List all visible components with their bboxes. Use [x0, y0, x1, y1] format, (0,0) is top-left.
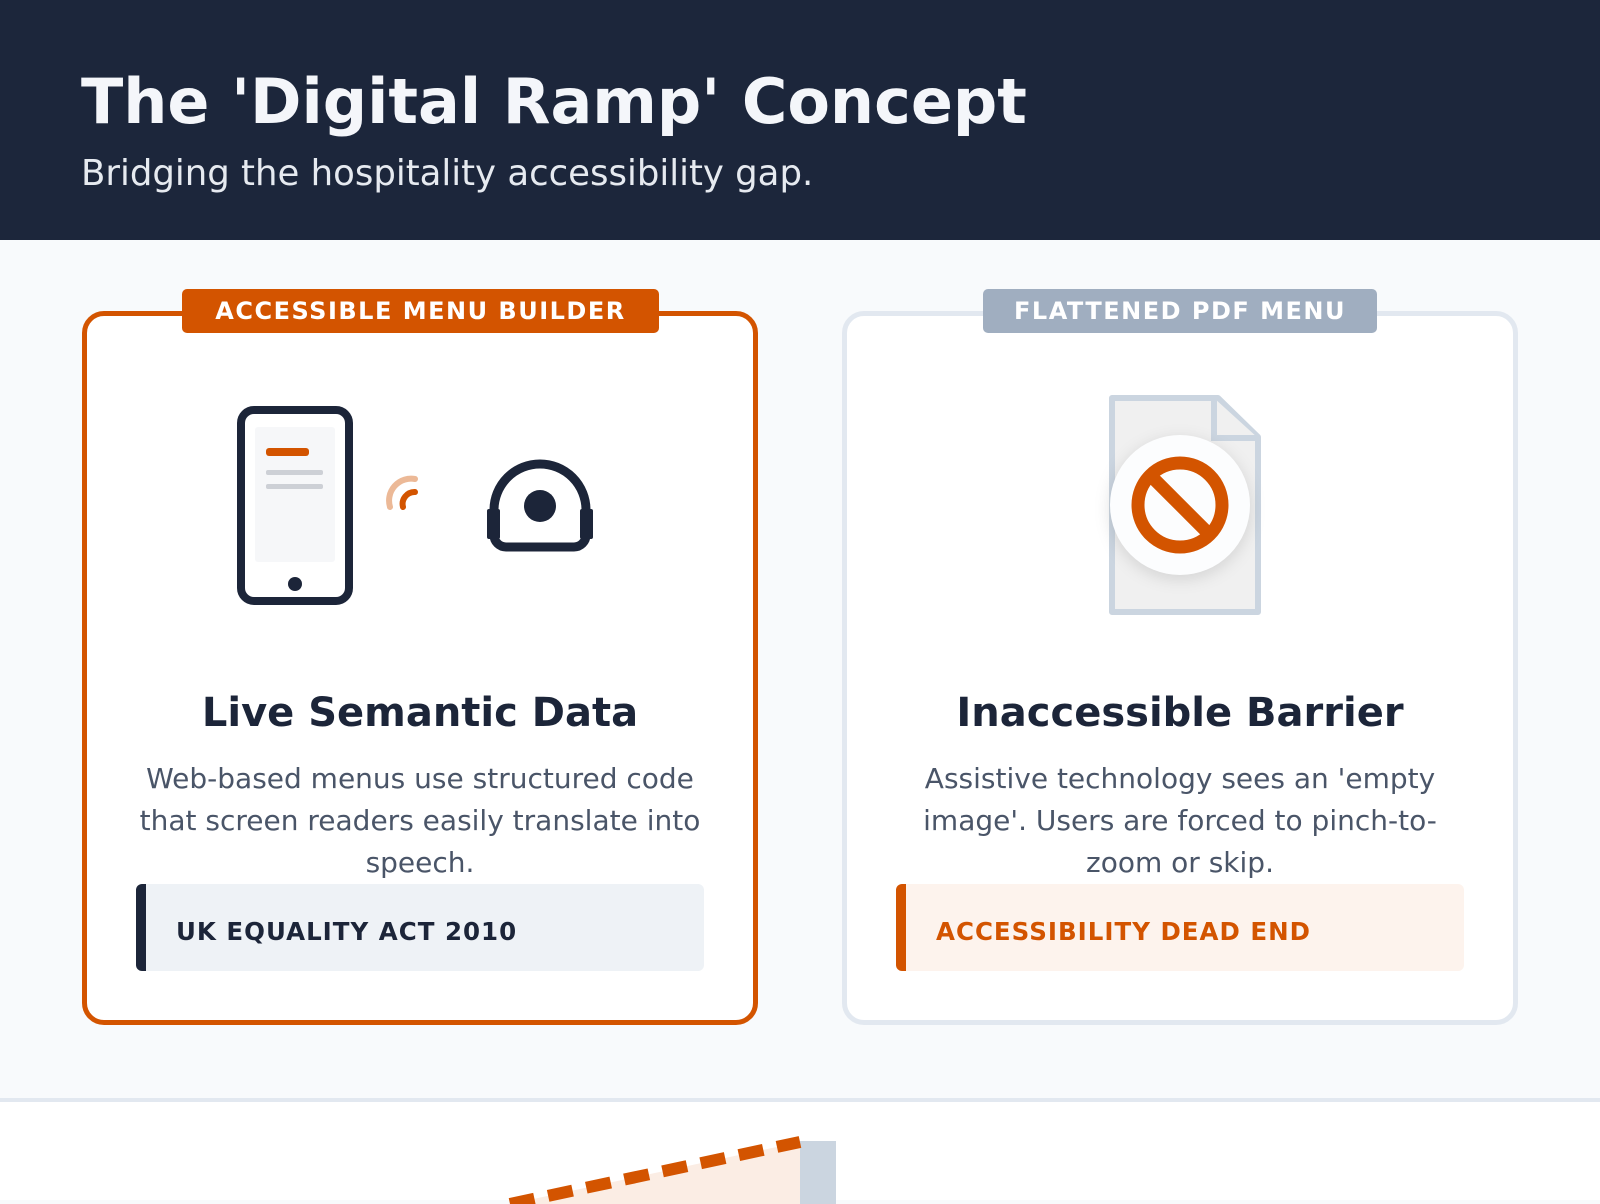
tag: flattened pdf menu [983, 289, 1377, 333]
bottom section [0, 1098, 1600, 1200]
heading: Inaccessible Barrier [956, 690, 1404, 736]
icon: pdf blocked [1106, 395, 1261, 615]
subtitle: Bridging the hospitality accessibility gap. [81, 153, 813, 194]
panel: accessible menu builder [82, 311, 758, 1025]
text block: Web-based menus use structured code that screen readers easily translate into speech. [140, 762, 700, 879]
icon: phone and headset [237, 406, 593, 605]
text block: Assistive technology sees an 'empty image'. Users are forced to pinch-to-zoom or skip. [923, 762, 1437, 879]
panel: flattened pdf [842, 311, 1518, 1025]
callout: UK EQUALITY ACT 2010 [176, 917, 517, 946]
callout [136, 884, 704, 971]
tag: accessible menu builder [182, 289, 659, 333]
callout: ACCESSIBILITY DEAD END [936, 917, 1311, 946]
header [0, 0, 1600, 240]
heading: Live Semantic Data [202, 690, 638, 736]
callout [896, 884, 1464, 971]
tag: accessible menu builder: ACCESSIBLE MENU BUILDER [215, 297, 626, 325]
title: The 'Digital Ramp' Concept [81, 65, 1027, 138]
ramp chart [508, 1136, 836, 1204]
tag: flattened pdf menu: FLATTENED PDF MENU [1014, 297, 1346, 325]
